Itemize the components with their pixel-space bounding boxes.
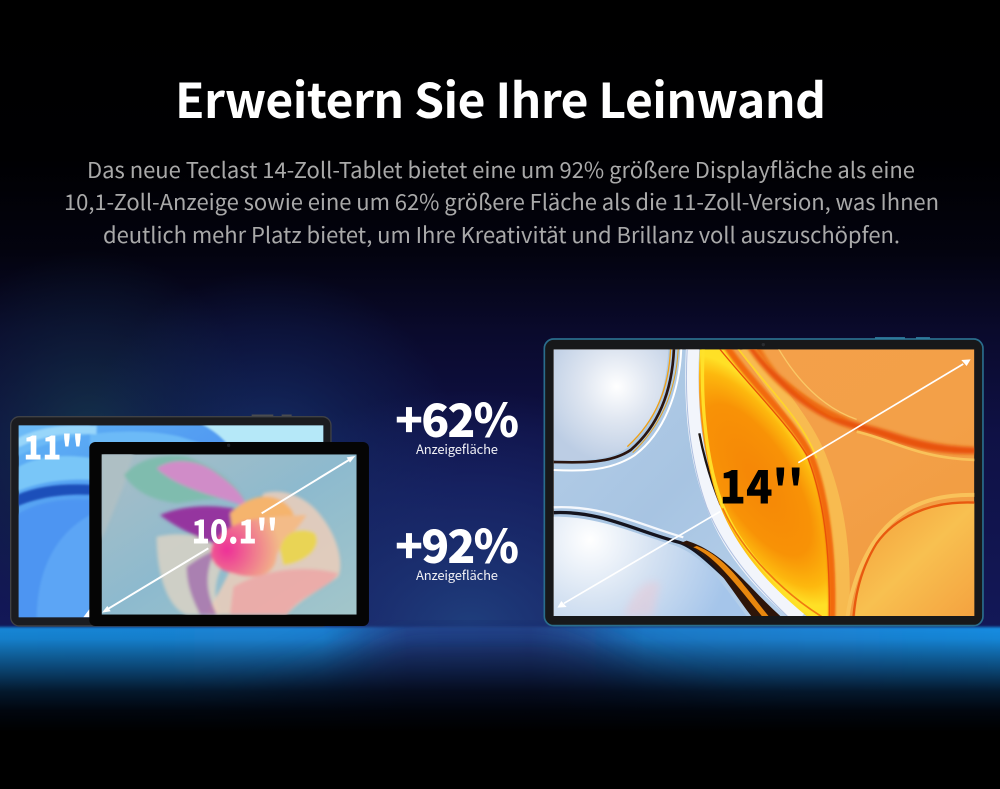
10.1 inch body (89, 442, 369, 626)
tablet: 11 inch (11, 415, 331, 626)
10.1 inch size label: 10.1'' (192, 504, 278, 553)
glossy dark edges of upper blob (554, 347, 674, 462)
lower white blob (554, 517, 747, 616)
tablet: 10.1 inch (89, 442, 369, 626)
11 inch body (11, 417, 331, 626)
14 inch camera (762, 343, 765, 346)
11 inch size label: 11'' (23, 420, 83, 469)
14 inch buttons (875, 335, 930, 340)
14 inch screen (554, 347, 977, 619)
14 inch size label: 14'' (719, 451, 803, 517)
orange leaf (699, 349, 831, 616)
glowing floor (0, 626, 1000, 789)
description text: 10,1-Zoll-Anzeige sowie eine um 62% größere Fläche als die 11-Zoll-Version, was Ihnen (64, 185, 939, 217)
10.1 inch screen (102, 454, 357, 615)
lower right blob (855, 503, 977, 619)
tablet: 14 inch (544, 338, 983, 626)
glossy dark edges of lower blob (554, 510, 724, 579)
14 inch diagonal arrow (557, 359, 971, 608)
upper orange streak (747, 347, 977, 454)
description text: deutlich mehr Platz bietet, um Ihre Kreativität und Brillanz voll auszuschöpfen. (103, 218, 900, 250)
14 inch body (544, 339, 983, 626)
10.1 inch diagonal arrow (102, 456, 355, 613)
description text: Das neue Teclast 14-Zoll-Tablet bietet eine um 92% größere Displayfläche als eine (87, 153, 915, 185)
leaf side bands (747, 347, 842, 619)
upper white blob (554, 349, 668, 460)
10.1 inch camera (227, 444, 230, 447)
blue area (554, 349, 807, 616)
stat: +62%: Anzeigefläche (416, 439, 498, 458)
stat: +92%: Anzeigefläche (416, 565, 498, 584)
description text (64, 153, 939, 250)
11 inch screen (17, 423, 327, 620)
title: Erweitern Sie Ihre Leinwand (175, 62, 826, 132)
white ribbon (692, 347, 800, 619)
stat: +62%: +62% (395, 385, 519, 451)
11 inch buttons (252, 413, 292, 418)
stat: +92%: +92% (395, 511, 519, 577)
